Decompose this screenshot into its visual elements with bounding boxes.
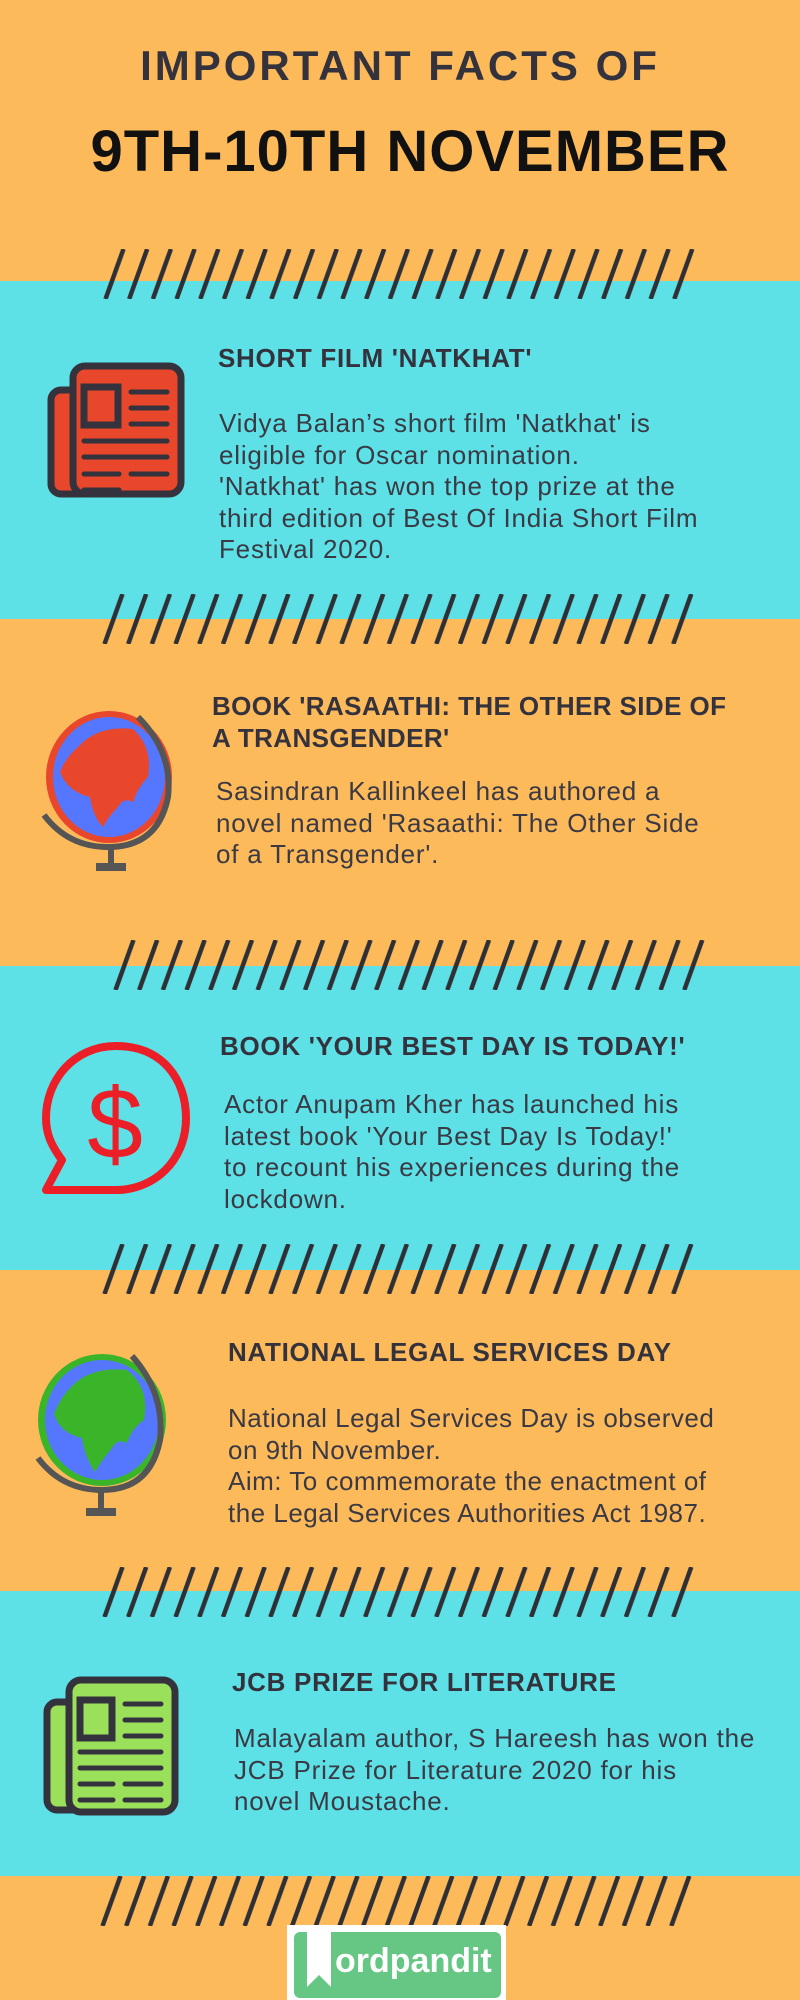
heading: A TRANSGENDER' xyxy=(212,723,450,753)
icon: green newspaper xyxy=(44,1676,178,1816)
panel: short film natkhat xyxy=(48,343,698,564)
text block: novel Moustache. xyxy=(234,1786,451,1816)
text block: third edition of Best Of India Short Film xyxy=(219,502,698,532)
logo: wordpandit xyxy=(287,1925,506,2000)
title: date: 9TH-10TH NOVEMBER xyxy=(90,119,729,184)
panel: book your best day xyxy=(42,1031,685,1214)
text block xyxy=(234,1723,755,1816)
heading xyxy=(212,691,726,753)
text block xyxy=(216,776,700,869)
heading: JCB PRIZE FOR LITERATURE xyxy=(232,1667,617,1697)
text block xyxy=(224,1089,680,1214)
text block: on 9th November. xyxy=(228,1434,441,1464)
heading: BOOK 'RASAATHI: THE OTHER SIDE OF xyxy=(212,691,726,721)
logo: wordpandit: ordpandit xyxy=(335,1942,492,1980)
icon: red newspaper xyxy=(48,362,184,498)
heading: NATIONAL LEGAL SERVICES DAY xyxy=(228,1337,672,1367)
text block: the Legal Services Authorities Act 1987. xyxy=(228,1498,706,1528)
text block: latest book 'Your Best Day Is Today!' xyxy=(224,1120,673,1150)
icon: bookmark W xyxy=(307,1932,331,1987)
panel: jcb prize xyxy=(44,1667,755,1816)
icon: red globe xyxy=(42,711,172,871)
text block: Malayalam author, S Hareesh has won the xyxy=(234,1723,755,1753)
text block: lockdown. xyxy=(224,1184,347,1214)
slashes divider 4 xyxy=(102,1244,694,1294)
text block: Aim: To commemorate the enactment of xyxy=(228,1466,706,1496)
slashes divider 1 xyxy=(103,249,694,299)
text block: novel named 'Rasaathi: The Other Side xyxy=(216,808,700,838)
slashes divider 6 xyxy=(100,1876,692,1926)
text block: eligible for Oscar nomination. xyxy=(219,440,580,470)
text block: Vidya Balan’s short film 'Natkhat' is xyxy=(219,408,651,438)
panel: national legal services day xyxy=(36,1337,714,1528)
text block: National Legal Services Day is observed xyxy=(228,1403,714,1433)
text block xyxy=(219,408,698,564)
heading: SHORT FILM 'NATKHAT' xyxy=(218,343,532,373)
text block: 'Natkhat' has won the top prize at the xyxy=(219,471,676,501)
text block: Sasindran Kallinkeel has authored a xyxy=(216,776,660,806)
text block: Actor Anupam Kher has launched his xyxy=(224,1089,679,1119)
text block xyxy=(228,1403,714,1528)
icon: dollar speech bubble: $ xyxy=(87,1068,143,1180)
slashes divider 3 xyxy=(113,940,704,990)
text block: to recount his experiences during the xyxy=(224,1152,680,1182)
text block: JCB Prize for Literature 2020 for his xyxy=(234,1754,677,1784)
heading: BOOK 'YOUR BEST DAY IS TODAY!' xyxy=(220,1031,685,1061)
text block: Festival 2020. xyxy=(219,534,392,564)
icon: green globe xyxy=(36,1354,166,1516)
text block: of a Transgender'. xyxy=(216,839,439,869)
title: important facts of: IMPORTANT FACTS OF xyxy=(140,42,660,89)
slashes divider 2 xyxy=(102,594,694,644)
slashes divider 5 xyxy=(102,1567,694,1617)
icon: dollar speech bubble xyxy=(42,1042,190,1194)
panel: book rasaathi xyxy=(42,691,726,871)
